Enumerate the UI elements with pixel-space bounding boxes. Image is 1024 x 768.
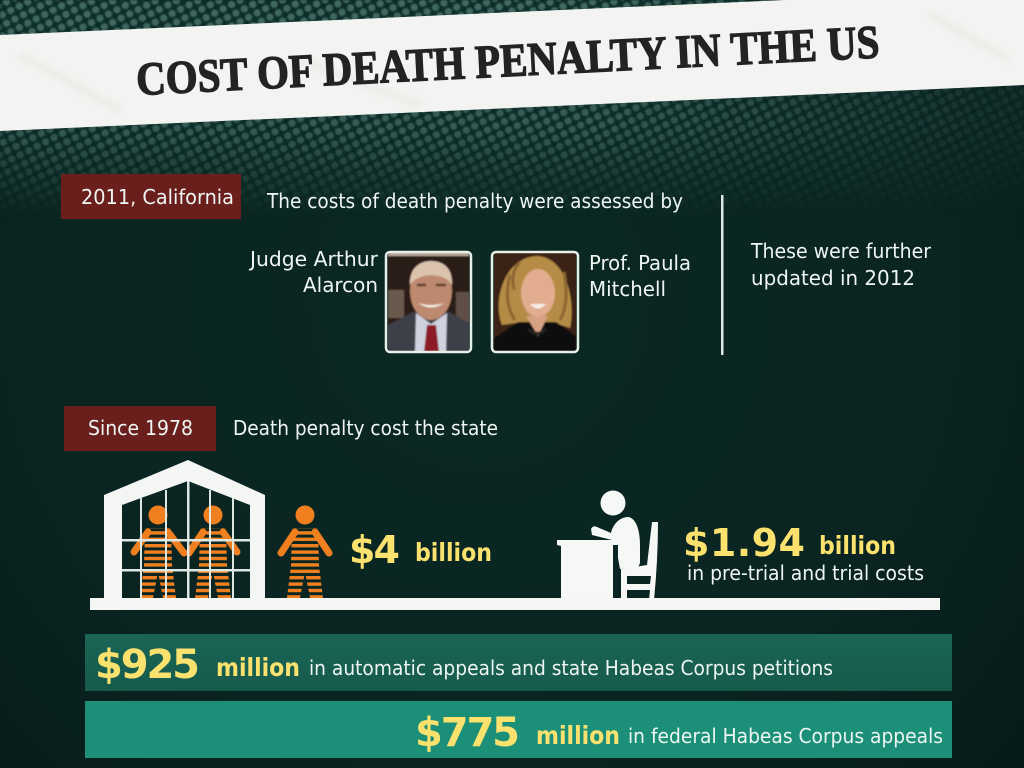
stat: $4 billion bbox=[349, 528, 492, 572]
bar: $925 million bbox=[85, 634, 952, 691]
icon: prisoner bbox=[281, 506, 329, 598]
note: updated in 2012: These were further bbox=[750, 239, 932, 263]
tag: Since 1978: Since 1978 bbox=[88, 416, 193, 440]
bar: $925 million: million bbox=[216, 653, 300, 682]
bar: $925 million: in automatic appeals and state Habeas Corpus petitions bbox=[309, 656, 833, 680]
stat: $4 billion: $4 bbox=[349, 528, 400, 572]
icon: prisoners in prison bbox=[104, 460, 265, 600]
bar: $925 million: $925 bbox=[95, 642, 200, 688]
photo: Judge Arthur Alarcon bbox=[386, 251, 471, 353]
title banner bbox=[0, 0, 1024, 131]
ground line bbox=[90, 598, 940, 610]
stat: $1.94 billion: in pre-trial and trial costs bbox=[687, 561, 924, 585]
stat: $1.94 billion bbox=[683, 521, 924, 585]
note: updated in 2012 bbox=[750, 239, 932, 290]
stat: $1.94 billion: billion bbox=[819, 531, 896, 560]
tag: Since 1978 bbox=[64, 406, 216, 451]
note: updated in 2012: updated in 2012 bbox=[751, 266, 915, 290]
label: Judge Arthur Alarcon bbox=[248, 247, 379, 297]
bar: $775 million: in federal Habeas Corpus appeals bbox=[628, 724, 943, 748]
stat: $1.94 billion: $1.94 bbox=[683, 521, 805, 565]
halftone pattern bbox=[0, 0, 1024, 215]
bar: $775 million: $775 bbox=[415, 710, 520, 756]
photo: Prof. Paula Mitchell bbox=[492, 251, 578, 353]
label: Judge Arthur Alarcon: Judge Arthur bbox=[248, 247, 379, 271]
prisoner 1 bbox=[134, 506, 184, 598]
label: Prof. Paula Mitchell: Mitchell bbox=[589, 277, 666, 301]
prisoner 2 bbox=[189, 506, 237, 598]
bar: $775 million: million bbox=[536, 721, 620, 750]
label: Judge Arthur Alarcon: Alarcon bbox=[303, 273, 378, 297]
prison building bbox=[104, 460, 265, 600]
tag: 2011, California bbox=[61, 174, 241, 219]
section text: Death penalty cost the state bbox=[233, 416, 498, 440]
title: COST OF DEATH PENALTY IN THE US bbox=[135, 16, 881, 106]
intro text: The costs of death penalty were assessed by bbox=[266, 189, 683, 213]
stat: $4 billion: billion bbox=[415, 538, 492, 567]
tag: 2011, California: 2011, California bbox=[81, 185, 234, 209]
label: Prof. Paula Mitchell bbox=[589, 251, 691, 301]
label: Prof. Paula Mitchell: Prof. Paula bbox=[589, 251, 691, 275]
bar: $775 million bbox=[85, 701, 952, 758]
icon: person at desk bbox=[557, 490, 658, 600]
